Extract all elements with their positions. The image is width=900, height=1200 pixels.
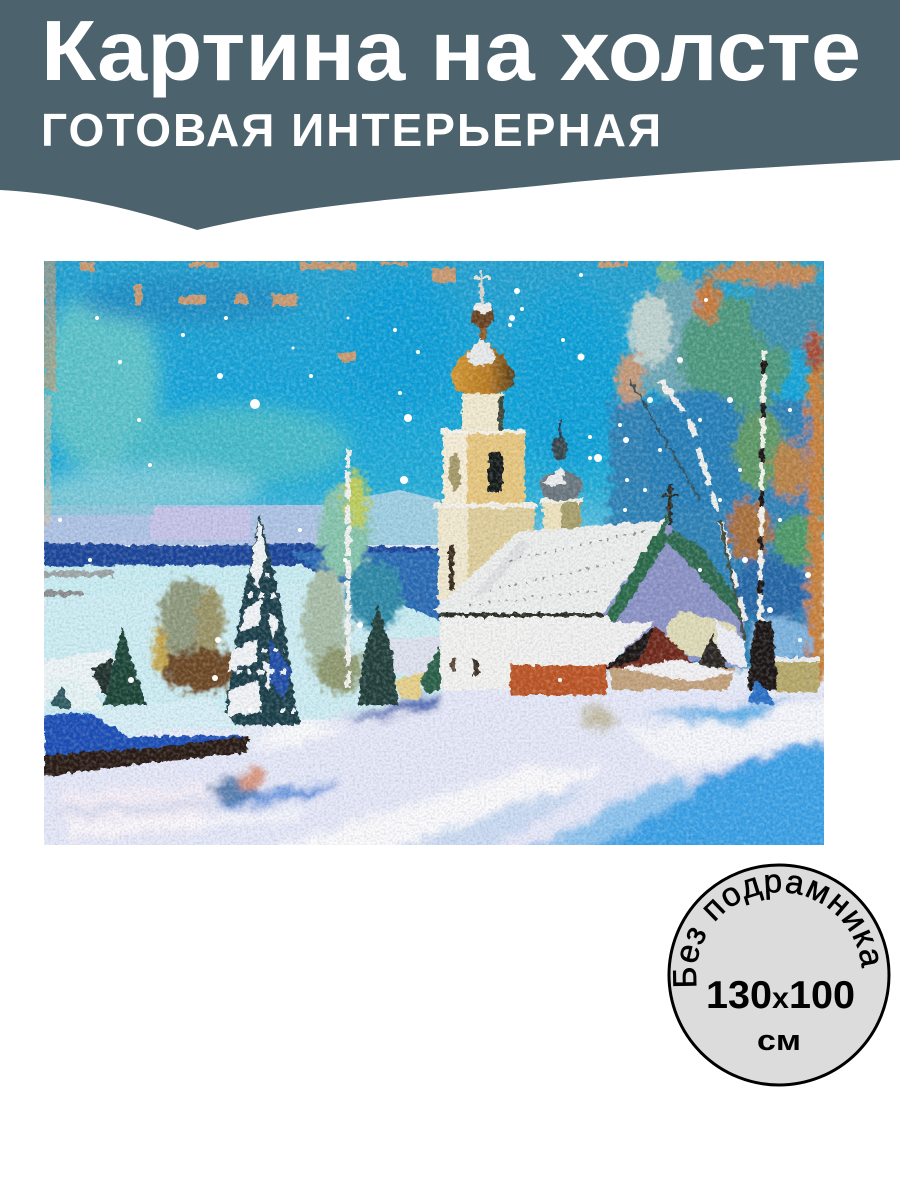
- small fir: [104, 625, 146, 705]
- lower roof and red barn: [558, 620, 654, 667]
- paint texture: [44, 261, 824, 845]
- bell tower: [438, 505, 535, 600]
- front house: [44, 697, 248, 777]
- title: Картина на холсте: [41, 4, 861, 99]
- snowy foreground: [56, 689, 824, 845]
- right fir: [358, 605, 398, 705]
- small cupola: [560, 502, 582, 530]
- left village houses: [44, 650, 125, 700]
- canvas edge, water and snowfields: [44, 261, 628, 720]
- badge size: 130x100: [706, 974, 855, 1017]
- badge unit: см: [757, 1025, 801, 1057]
- main dome: [451, 336, 514, 394]
- header banner: [0, 0, 900, 230]
- painting: snowy church landscape: [30, 261, 840, 860]
- birch trunk: [346, 450, 350, 690]
- background bushes and birches: [152, 472, 403, 694]
- church wall: [440, 616, 610, 690]
- right low house: [388, 636, 440, 678]
- canvas edge: orange flecks: [44, 261, 628, 525]
- size badge: [668, 864, 890, 1086]
- right tree foliage: [610, 261, 830, 680]
- distant water: [44, 543, 440, 600]
- church: [432, 270, 820, 695]
- badge arc text: Без подрамника: [672, 874, 878, 986]
- sky: [40, 261, 824, 545]
- main roof: [432, 520, 665, 618]
- right gable: [600, 520, 745, 668]
- subtitle: ГОТОВАЯ ИНТЕРЬЕРНАЯ: [41, 104, 661, 156]
- right birch tree trunks and branches: [630, 350, 778, 705]
- falling snow: [58, 273, 811, 712]
- main fir: [222, 515, 300, 725]
